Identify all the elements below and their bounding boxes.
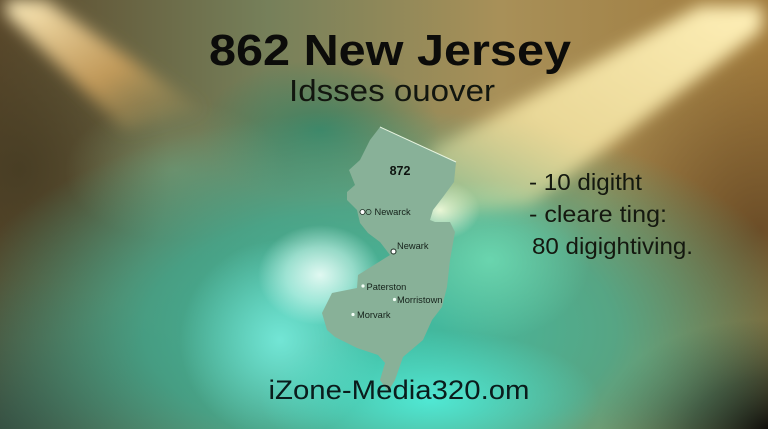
side notes: 80 digightiving. <box>532 233 693 259</box>
area code label: 872 <box>390 164 410 178</box>
city: Morvark: Morvark <box>357 310 391 320</box>
title: 862 New Jersey <box>209 26 572 75</box>
city: Paterston: Paterston <box>366 282 406 292</box>
side notes <box>529 169 693 259</box>
side notes: - cleare ting: <box>529 201 667 227</box>
spotlight beam: left <box>6 0 205 130</box>
city: Newark: Newark <box>397 241 429 251</box>
city: Newark <box>391 241 429 254</box>
side notes: - 10 digitht <box>529 169 643 195</box>
website: iZone-Media320.om <box>268 375 530 405</box>
city: Morristown: Morristown <box>397 295 442 305</box>
map: New Jersey <box>322 127 456 392</box>
spotlight beam: right <box>430 6 762 215</box>
subtitle: Idsses ouover <box>289 73 495 108</box>
city: Newarck: Newarck <box>374 207 411 217</box>
